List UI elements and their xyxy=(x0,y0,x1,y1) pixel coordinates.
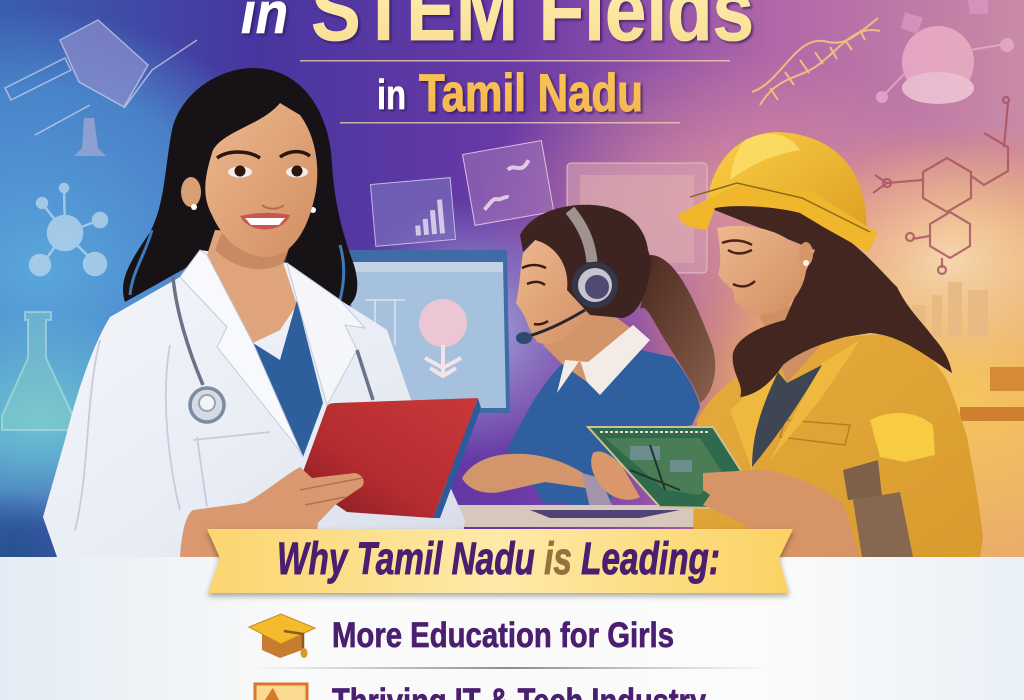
neck shadow xyxy=(215,232,292,269)
coat xyxy=(43,250,465,557)
background screens xyxy=(370,141,707,273)
monitor xyxy=(345,250,510,413)
doctor hand and forearm xyxy=(180,467,364,557)
jacket underarm shadow xyxy=(843,460,882,500)
lapel xyxy=(730,340,860,470)
collar xyxy=(557,325,650,395)
red tablet xyxy=(300,398,481,518)
icon: skyline bars xyxy=(912,282,1024,421)
jacket xyxy=(693,333,983,557)
icon: flask xyxy=(2,312,74,430)
nose xyxy=(262,205,284,209)
icon: laptop screen xyxy=(255,684,307,700)
subtitle: in Tamil Nadu xyxy=(377,64,643,123)
cuff xyxy=(582,473,612,508)
lapel left xyxy=(180,250,303,457)
title rule bottom xyxy=(340,122,680,124)
stethoscope xyxy=(173,277,373,422)
subtitle: in Tamil Nadu: in xyxy=(377,71,406,118)
hair xyxy=(520,205,652,318)
jacket highlight xyxy=(870,413,935,462)
scrub top xyxy=(253,300,323,457)
headset xyxy=(516,210,618,344)
list item: thriving IT and tech industry xyxy=(255,682,706,700)
icon: planet sphere xyxy=(876,0,1014,104)
engineer left hand xyxy=(591,451,640,500)
neck and chest xyxy=(207,230,297,343)
coat sleeve shading xyxy=(75,340,270,530)
eye, brow, smile xyxy=(722,241,755,286)
neck xyxy=(543,305,633,382)
icon: atom network xyxy=(30,184,107,275)
divider xyxy=(250,667,770,669)
circuit board and hands xyxy=(588,427,913,557)
ears and earrings xyxy=(181,177,316,213)
text: More Education for Girls xyxy=(332,616,674,655)
eye and lips xyxy=(522,265,548,324)
blue hair highlights xyxy=(130,230,344,300)
face xyxy=(205,103,317,257)
banner heading: Why Tamil Nadu is Leading: xyxy=(277,533,720,584)
engineer right hand and forearm xyxy=(703,470,860,557)
icon: satellite xyxy=(5,20,197,156)
hair xyxy=(707,202,952,397)
middle woman: call centre agent xyxy=(462,205,715,508)
neck xyxy=(757,300,833,383)
icon: molecule hexagons xyxy=(873,97,1009,274)
hands on keyboard xyxy=(462,454,586,493)
board xyxy=(588,427,745,508)
inner shirt xyxy=(752,365,822,467)
shirt xyxy=(507,350,700,507)
desk xyxy=(317,505,708,527)
lapel right xyxy=(287,263,365,405)
banner: why Tamil Nadu is leading xyxy=(207,529,793,593)
cuff xyxy=(853,492,913,557)
eyes and brows xyxy=(217,152,310,178)
face xyxy=(717,226,806,315)
title rule top xyxy=(300,60,730,62)
icon: DNA helix xyxy=(752,18,880,105)
pocket xyxy=(780,420,850,445)
bottom panel xyxy=(0,557,1024,700)
ear and earring xyxy=(799,242,813,266)
face xyxy=(516,235,600,344)
ponytail xyxy=(640,255,715,403)
list item: more education for girls xyxy=(249,614,674,658)
subtitle: in Tamil Nadu: Tamil Nadu xyxy=(419,64,643,123)
hair back xyxy=(123,68,357,307)
icon: graduation cap xyxy=(249,614,315,658)
helmet xyxy=(678,132,878,252)
right woman: engineer xyxy=(678,132,983,557)
smile xyxy=(240,213,290,229)
doctor figure xyxy=(43,68,465,557)
